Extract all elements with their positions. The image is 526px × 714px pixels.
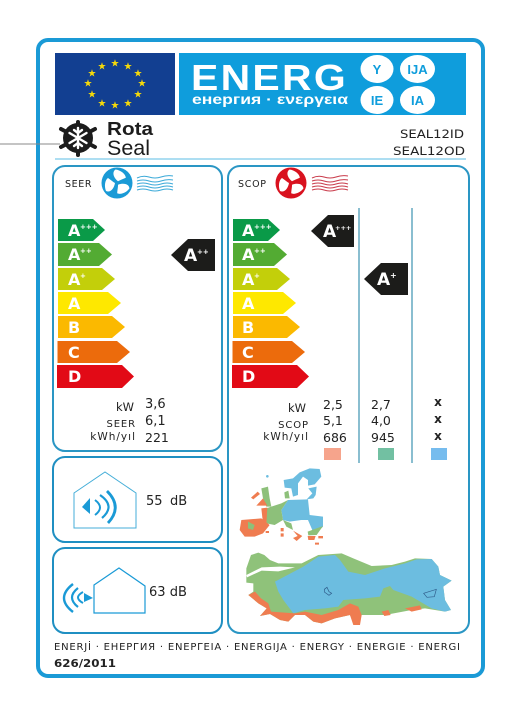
energy class scale — [232, 219, 309, 388]
model names: SEAL12OD — [393, 144, 465, 158]
indoor noise value — [146, 494, 187, 509]
rating arrow: A+: + — [390, 271, 397, 280]
outdoor noise value: 63 dB — [149, 585, 187, 600]
rating arrow: A+: A — [377, 270, 391, 290]
footer energy words: ENERJİ · ЕНЕРГИЯ · ΕΝΕΡΓΕΙΑ · ENERGIJA · ENERGY · ENERGIE · ENERGI — [54, 640, 460, 653]
SCOP values: 4,0 — [371, 413, 391, 428]
EU flag: ★ — [98, 98, 107, 110]
SEER values: 221 — [145, 430, 169, 445]
energy class scale — [57, 219, 134, 388]
SCOP values: kWh/yıl — [263, 431, 309, 443]
SEER heading: SEER — [65, 179, 92, 190]
brand logo: Seal — [107, 137, 150, 160]
EU flag: ★ — [124, 62, 133, 72]
energy banner — [179, 53, 466, 115]
energy banner: ENERG — [191, 57, 348, 98]
model names: SEAL12ID — [400, 127, 464, 141]
icon: house with outdoor speaker — [64, 568, 145, 613]
energy class scale: +++ — [80, 223, 98, 231]
energy banner: IE — [371, 93, 383, 108]
rating arrow: A+ — [364, 263, 408, 295]
energy class scale: +++ — [254, 223, 272, 231]
icon: red fan — [276, 168, 348, 198]
icon: house with speaker — [74, 472, 136, 528]
energy class scale: B — [242, 318, 254, 337]
SCOP values: x — [434, 395, 442, 409]
SEER values: kW — [116, 400, 134, 414]
model names — [393, 127, 465, 158]
energy class scale: A — [68, 221, 81, 240]
climate columns dividers — [359, 208, 412, 463]
energy class scale: + — [254, 272, 260, 280]
energy class scale: A — [68, 245, 81, 264]
EU flag: ★ — [84, 78, 93, 90]
EU flag: ★ — [111, 58, 120, 70]
energy class scale: D — [242, 367, 255, 386]
EU flag: ★ — [88, 90, 97, 100]
EU flag: ★ — [111, 100, 120, 112]
SEER values: kWh/yıl — [90, 431, 136, 443]
SCOP values: 686 — [323, 430, 347, 445]
rating arrow: A++ — [171, 239, 215, 271]
SCOP values: x — [434, 412, 442, 426]
rating arrow: A+++: A — [323, 222, 337, 242]
EU flag: ★ — [138, 78, 147, 90]
rating arrow: A++: ++ — [197, 248, 209, 256]
SCOP values: 5,1 — [323, 413, 343, 428]
SCOP values: 945 — [371, 430, 395, 445]
energy class scale: A — [242, 270, 255, 289]
energy banner: IJA — [407, 62, 428, 77]
map: Europe climate zones — [240, 468, 323, 545]
brand logo: Rota — [107, 119, 154, 139]
outer label frame — [38, 40, 483, 676]
EU flag: ★ — [88, 68, 97, 80]
map: Turkey climate zones — [246, 553, 452, 625]
energy class scale: + — [80, 272, 86, 280]
icon: blue fan — [102, 168, 173, 198]
energy class scale: A — [242, 221, 255, 240]
EU flag: ★ — [134, 68, 143, 80]
energy banner: енергия · ενεργεια — [192, 91, 348, 107]
energy class scale: C — [68, 343, 80, 362]
brand logo — [0, 119, 154, 160]
SCOP heading: SCOP — [238, 179, 267, 190]
panel: SCOP heating — [228, 166, 469, 633]
EU flag: ★ — [134, 90, 143, 100]
SEER values: 3,6 — [145, 397, 166, 412]
energy class scale: B — [68, 318, 80, 337]
energy class scale: A — [242, 294, 255, 313]
energy class scale: ++ — [80, 247, 92, 255]
energy banner: Y — [373, 62, 382, 77]
rating arrow: A+++ — [311, 215, 354, 247]
SCOP values: x — [434, 429, 442, 443]
SCOP values: kW — [288, 401, 306, 415]
SCOP values — [263, 395, 442, 445]
rating arrow: A+++: +++ — [335, 224, 351, 232]
SEER values: 6,1 — [145, 414, 166, 429]
energy class scale: A — [68, 270, 81, 289]
energy class scale: D — [68, 367, 81, 386]
rating arrow: A++: A — [184, 246, 198, 266]
energy class scale: ++ — [254, 247, 266, 255]
panel: indoor noise — [53, 457, 222, 542]
EU flag — [55, 53, 175, 115]
EU flag: ★ — [98, 62, 107, 72]
energy banner: IA — [411, 93, 425, 108]
SEER values — [90, 397, 169, 445]
SCOP values: 2,5 — [323, 397, 343, 412]
panel: SEER cooling — [53, 166, 222, 451]
energy class scale: C — [242, 343, 254, 362]
SCOP values: 2,7 — [371, 397, 391, 412]
regulation number: 626/2011 — [54, 658, 116, 670]
indoor noise value: dB — [170, 494, 187, 509]
panel: outdoor noise — [53, 548, 222, 633]
energy class scale: A — [242, 245, 255, 264]
energy class scale: A — [68, 294, 81, 313]
EU flag: ★ — [124, 98, 133, 110]
indoor noise value: 55 — [146, 494, 163, 509]
SEER values: SEER — [106, 419, 136, 430]
SCOP values: SCOP — [278, 420, 309, 431]
climate colour swatches — [324, 448, 447, 460]
